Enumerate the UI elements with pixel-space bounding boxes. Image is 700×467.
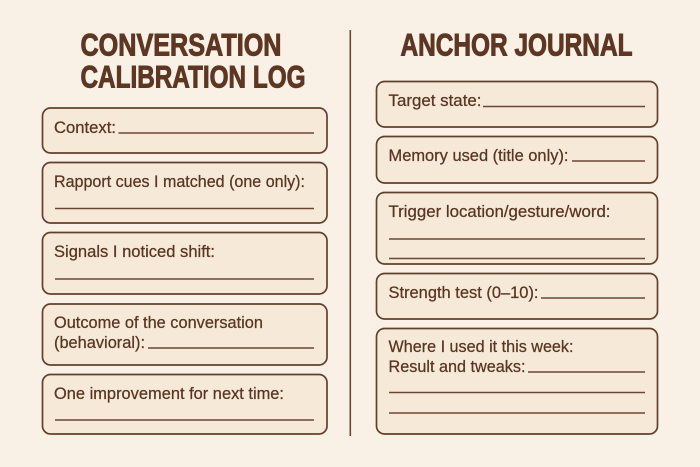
panel: Where used: Where I used it this week:	[388, 338, 574, 356]
panel: Where used: Result and tweaks:	[388, 358, 526, 376]
panel: Rapport cues: Rapport cues I matched (one only):	[54, 173, 305, 191]
panel: Signals	[42, 232, 327, 294]
panel: Outcome: (behavioral):	[54, 334, 145, 352]
panel: Where used	[376, 328, 658, 434]
panel: Target state	[376, 82, 658, 127]
panel: One improvement	[42, 374, 327, 434]
panel: Trigger: Trigger location/gesture/word:	[388, 203, 610, 221]
panel: Memory used: Memory used (title only):	[388, 147, 568, 165]
panel: Trigger	[376, 192, 658, 264]
panel: Strength test: Strength test (0–10):	[388, 284, 538, 302]
panel: Context	[42, 108, 327, 153]
panel: Outcome	[42, 304, 327, 365]
title: Conversation Calibration Log: CONVERSATION	[80, 26, 282, 62]
panel: One improvement: One improvement for next time:	[54, 385, 284, 403]
center divider	[350, 30, 351, 436]
title: Conversation Calibration Log	[80, 26, 306, 94]
panel: Memory used	[376, 136, 658, 183]
panel: Signals: Signals I noticed shift:	[54, 243, 215, 261]
panel: Rapport cues	[42, 162, 327, 223]
panel: Outcome: Outcome of the conversation	[54, 314, 263, 332]
panel: Context: Context:	[54, 119, 116, 137]
title: Conversation Calibration Log: CALIBRATION LOG	[80, 58, 306, 94]
title: Anchor Journal: ANCHOR JOURNAL	[400, 26, 632, 62]
panel: Target state: Target state:	[388, 92, 482, 110]
panel: Strength test	[376, 274, 658, 319]
